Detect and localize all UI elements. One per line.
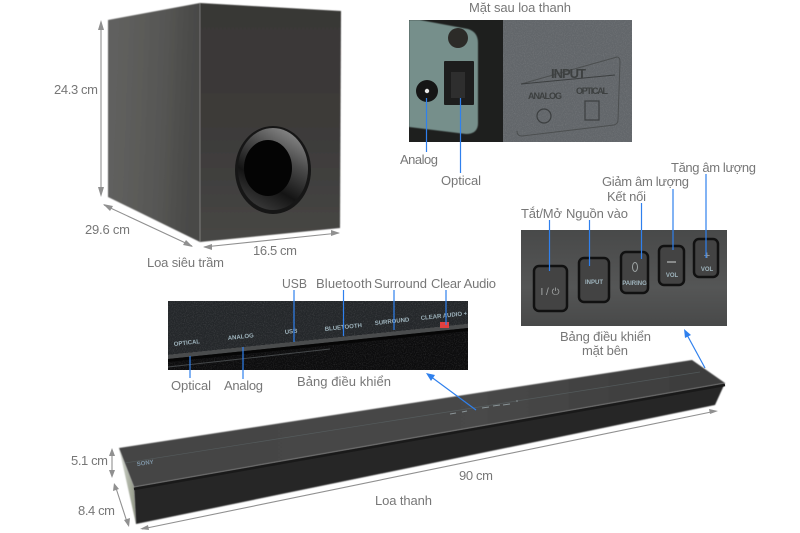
subwoofer width dimension: 16.5 cm [253,243,297,258]
pairing button: PAIRING [622,281,647,287]
subwoofer height dimension: 24.3 cm [54,82,98,97]
callout: Bluetooth: Bluetooth [316,276,372,291]
brand: SONY [136,460,154,468]
soundbar length dimension: 90 cm [459,468,493,483]
red indicator [440,322,449,328]
volume up button: + [704,250,710,262]
input button: INPUT [585,280,603,286]
volume down button [659,246,684,285]
embossed input label: ANALOG [528,91,562,101]
subwoofer side face [108,3,200,242]
caption: control panel: Bảng điều khiển [297,374,391,389]
embossed input label: INPUT [551,66,586,81]
callout: USB [282,276,307,342]
top accent line [125,372,700,463]
volume up button [694,239,718,277]
analog jack [416,80,438,102]
subwoofer height dimension [54,20,104,197]
soundbar height dimension [71,448,115,478]
subwoofer caption: Loa siêu trầm [147,255,224,270]
callout: input: Nguồn vào [566,206,628,221]
panel: rear connectors photo [409,20,632,142]
soundbar top face [119,360,725,487]
callout: volume down [602,174,689,250]
callout: Clear Audio: Clear Audio [431,276,496,291]
callout: volume down: Giảm âm lượng [602,174,689,189]
callout: Optical button [171,356,211,393]
callout: power [521,206,562,271]
embossed input label: OPTICAL [576,86,608,96]
power button [534,266,567,311]
volume up button: VOL [701,267,713,273]
button labels: ANALOG [228,333,254,342]
callout: USB: USB [282,276,307,291]
callout: Analog button [224,347,263,393]
optical port [444,61,474,105]
caption: side control panel: mặt bên [582,343,628,358]
top buttons [450,401,518,414]
arrow: to top control strip [426,373,476,410]
teal back plate [409,20,478,134]
soundbar depth dimension [78,483,130,527]
soundbar depth dimension: 8.4 cm [78,503,115,518]
panel: top control strip photo [168,301,468,370]
callout: Surround [374,276,427,330]
callout: power: Tắt/Mở [521,206,562,221]
callout: Bluetooth [316,276,372,336]
subwoofer width dimension [203,230,340,258]
button labels: USB [285,329,298,336]
subwoofer depth dimension: 29.6 cm [85,222,130,237]
panel: side control buttons photo [521,230,727,326]
callout: optical connector: Optical [441,173,481,188]
power button: I / ⏻ [540,287,560,298]
seam line [134,385,725,489]
volume down button: VOL [666,273,678,279]
pairing button [621,252,648,293]
callout: analog connector [400,98,438,167]
embossed input label [517,57,620,136]
panel: soundbar [119,360,725,524]
mounting screw [448,28,468,48]
caption: soundbar: Loa thanh [375,493,432,508]
callout: Analog button: Analog [224,378,263,393]
soundbar length dimension [140,409,718,530]
panel: subwoofer [54,3,341,270]
callout: Clear Audio [431,276,496,325]
callout: pairing: Kết nối [607,189,646,204]
heading: rear of soundbar: Mặt sau loa thanh [469,0,571,15]
subwoofer front face [200,3,341,242]
callout: volume up [671,160,756,258]
callout: Surround: Surround [374,276,427,291]
soundbar end cap [119,448,136,524]
button labels: BLUETOOTH [325,323,362,333]
callout: optical connector [441,98,481,188]
button labels: CLEAR AUDIO + [421,311,468,322]
input button [579,258,609,302]
callout: input [566,206,628,266]
callout: pairing [607,189,646,259]
caption: side control panel: Bảng điều khiển [560,329,651,344]
subwoofer depth dimension [85,204,193,247]
callout: volume up: Tăng âm lượng [671,160,756,175]
caption: side control panel [560,329,651,358]
arrow: to side control panel [684,329,705,368]
button labels: OPTICAL [174,339,201,348]
button labels [174,311,468,348]
callout: analog connector: Analog [400,152,438,167]
callout: Optical button: Optical [171,378,211,393]
soundbar height dimension: 5.1 cm [71,453,108,468]
soundbar front grille [134,383,725,524]
button labels: SURROUND [375,317,410,327]
button strip [168,324,468,359]
subwoofer bass port [235,126,311,214]
